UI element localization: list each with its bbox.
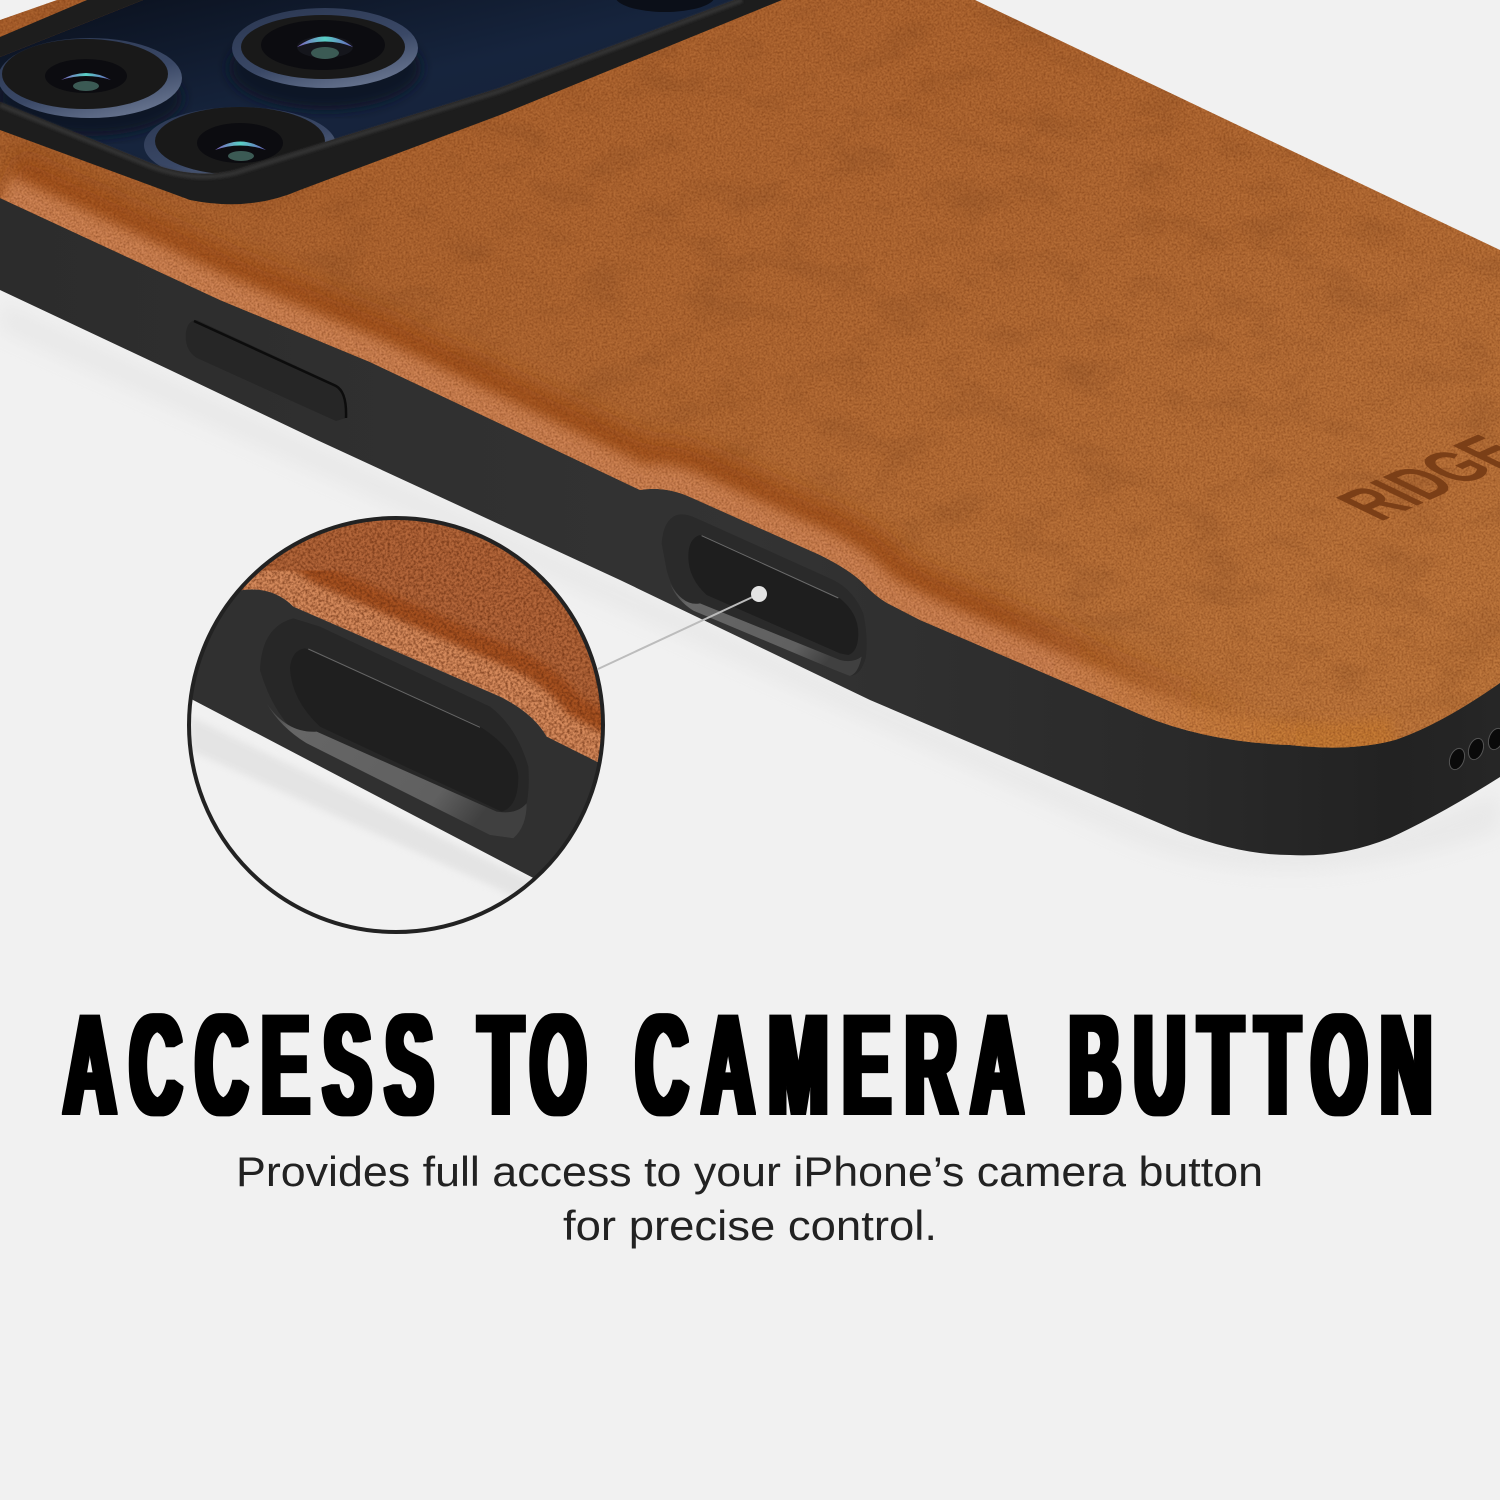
title: CAMERA	[636, 985, 1023, 1144]
lenses	[0, 0, 715, 183]
speaker holes	[1447, 726, 1500, 772]
callout leader line	[598, 594, 759, 669]
title: ACCESS	[64, 985, 433, 1144]
phone case	[0, 0, 1500, 870]
side button	[186, 320, 346, 421]
description: Provides full access to your iPhone’s camera button	[236, 1148, 1263, 1195]
camera frame	[0, 0, 782, 204]
magnified inset circle	[187, 516, 605, 934]
callout dot	[751, 586, 767, 602]
lower ring highlight	[670, 583, 862, 676]
inset button highlight	[308, 649, 480, 727]
title: BUTTON	[1069, 985, 1432, 1144]
inset recess	[260, 618, 528, 812]
description	[236, 1148, 1263, 1249]
description: for precise control.	[563, 1202, 937, 1249]
title: TO	[479, 985, 586, 1144]
button	[688, 535, 858, 655]
inset leather	[241, 520, 601, 762]
camera island	[0, 0, 782, 204]
inset ring highlight	[267, 703, 527, 838]
camera plate	[0, 0, 735, 174]
inset button	[290, 648, 518, 812]
camera button cutout	[662, 514, 867, 676]
recess	[662, 514, 867, 676]
title	[64, 985, 1432, 1144]
lens: bottom	[144, 107, 335, 174]
inset black side wall	[192, 590, 598, 878]
inset shadow	[191, 720, 528, 894]
lens: left	[0, 38, 182, 136]
black case side wall	[0, 190, 1500, 855]
case shadow	[0, 300, 1500, 870]
lens: top right	[229, 8, 421, 110]
button highlight	[702, 536, 838, 598]
